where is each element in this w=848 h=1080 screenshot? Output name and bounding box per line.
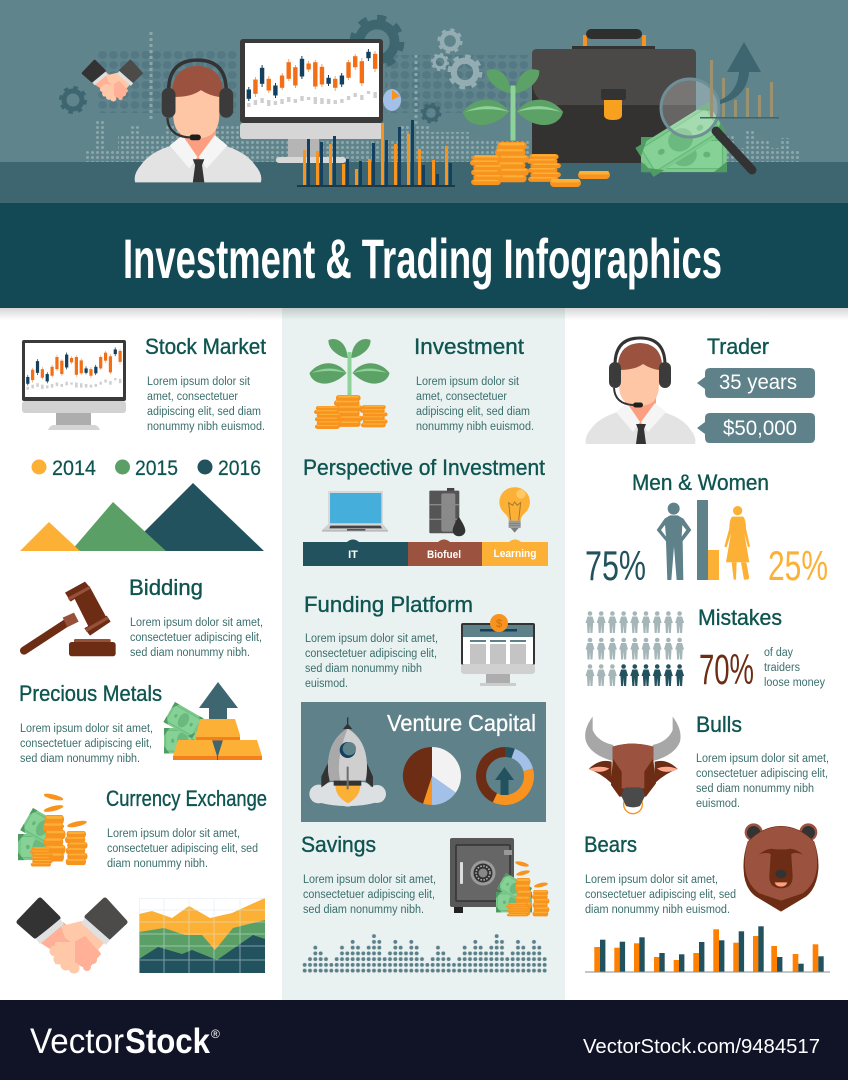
footer watermark bar: VectorStock.com/9484517 — [583, 1036, 820, 1058]
stat caption: traiders — [764, 662, 800, 674]
legend: years: 2015 — [135, 457, 178, 480]
body text: sed diam nonummy nibh — [305, 663, 422, 675]
bar comparison — [697, 500, 719, 580]
panel: mistakes — [586, 605, 825, 694]
legend: years: 2016 — [218, 457, 261, 480]
heading: Mistakes — [698, 605, 782, 630]
body text — [147, 376, 265, 433]
pictogram: 27 people — [586, 611, 684, 686]
body text — [303, 874, 436, 916]
heading: Funding Platform — [304, 592, 473, 617]
callout: income: $50,000 — [723, 417, 797, 440]
body text: consectetuer adipiscing elit, sed — [107, 843, 258, 855]
gears — [61, 19, 480, 122]
icon: funding monitor with coin — [461, 614, 535, 686]
stat: 75 percent: 75% — [585, 542, 646, 589]
icon: gavel — [24, 582, 116, 656]
body text: consectetuer adipiscing elit, — [20, 738, 152, 750]
body text: sed diam nonummy nibh. — [303, 904, 424, 916]
body text: consectetuer adipiscing elit, — [303, 889, 435, 901]
body text: euismod. — [696, 798, 740, 810]
heading: Stock Market — [145, 334, 266, 359]
body text: Lorem ipsum dolor sit amet, — [585, 874, 718, 886]
icon: sprout on coins — [310, 339, 390, 429]
panel: stock market — [22, 334, 266, 433]
body text: amet, consectetuer — [416, 391, 507, 403]
icon: bull head — [585, 717, 681, 814]
panel: currency exchange — [18, 786, 267, 870]
body text: Lorem ipsum dolor sit amet, — [20, 723, 153, 735]
body text: consectetuer adipiscing elit, — [305, 648, 437, 660]
mountain chart — [20, 483, 264, 551]
panel: savings — [301, 832, 549, 916]
segmented bar: it, biofuel, learning: IT — [348, 549, 358, 561]
body text — [696, 753, 829, 810]
icon: bear head — [743, 823, 818, 912]
panel: men and women — [585, 470, 828, 589]
icon: handshake — [19, 900, 125, 974]
footer watermark bar — [0, 1000, 848, 1080]
body text — [130, 617, 263, 659]
icon: safe with coins — [450, 838, 549, 916]
footer watermark bar: ® — [211, 1027, 220, 1041]
dot column chart — [302, 933, 547, 974]
heading: Bidding — [129, 575, 203, 600]
body text — [107, 828, 258, 870]
bar chart on desk — [297, 120, 455, 187]
hero illustration banner — [0, 0, 848, 203]
heading: Perspective of Investment — [303, 455, 545, 480]
heading: Savings — [301, 832, 376, 857]
icon: funding monitor with coin: $ — [496, 618, 502, 630]
body text: Lorem ipsum dolor sit amet, — [305, 633, 438, 645]
panel: perspective of investment — [303, 455, 548, 566]
body text: adipiscing elit, sed diam — [147, 406, 261, 418]
callout: age — [697, 368, 815, 398]
world map dot pattern — [86, 32, 800, 162]
body text: sed diam nonummy nibh. — [130, 647, 250, 659]
panel: precious metals — [19, 681, 262, 765]
plant growing from coins — [463, 69, 610, 187]
footer watermark bar: Vector — [30, 1022, 124, 1061]
icon: laptop — [322, 491, 388, 532]
body text: consectetuer adipiscing elit, — [696, 768, 828, 780]
callout: income — [697, 413, 815, 443]
donut chart with arrow — [481, 752, 529, 800]
heading: Bulls — [696, 712, 742, 737]
callout: age: 35 years — [719, 371, 797, 394]
body text: diam nonummy nibh. — [107, 858, 208, 870]
heading: Currency Exchange — [106, 786, 267, 811]
segmented bar: it, biofuel, learning — [303, 540, 548, 566]
body text: Lorem ipsum dolor sit amet, — [696, 753, 829, 765]
body text: amet, consectetuer — [147, 391, 238, 403]
icon: gold bars with arrow and money — [163, 682, 262, 760]
body text: nonummy nibh euismod. — [416, 421, 534, 433]
body text: consectetuer adipiscing elit, — [130, 632, 262, 644]
body text: nonummy nibh euismod. — [147, 421, 265, 433]
body text — [305, 633, 438, 690]
heading: Bears — [584, 832, 637, 857]
stat: 70 percent: 70% — [699, 646, 754, 694]
heading: Trader — [707, 334, 769, 359]
briefcase — [532, 29, 696, 163]
body text: Lorem ipsum dolor sit — [147, 376, 251, 388]
heading: Men & Women — [632, 470, 769, 495]
legend: years: 2014 — [52, 457, 96, 480]
panel: bears — [584, 823, 818, 916]
body text — [585, 874, 736, 916]
body text: adipiscing elit, sed diam — [416, 406, 530, 418]
body text: diam nonummy nibh euismod. — [585, 904, 730, 916]
panel: venture capital — [301, 702, 546, 822]
segmented bar: it, biofuel, learning: Learning — [494, 548, 536, 560]
money and magnifier — [636, 79, 752, 177]
pie chart — [403, 747, 461, 805]
icon: coins and money — [18, 792, 88, 867]
panel: bulls — [585, 712, 829, 814]
area chart — [139, 898, 265, 973]
panel: investment — [310, 334, 534, 433]
icon: trader portrait — [586, 338, 695, 444]
heading: Venture Capital — [387, 710, 536, 736]
body text: Lorem ipsum dolor sit amet, — [107, 828, 240, 840]
stat caption — [764, 647, 825, 689]
trader figure — [135, 60, 261, 182]
legend: years — [32, 457, 261, 480]
panel: funding platform — [304, 592, 535, 690]
icon: light bulb — [499, 487, 530, 533]
icon: man silhouette — [657, 503, 691, 580]
heading: Precious Metals — [19, 681, 162, 706]
heading: Investment — [414, 334, 524, 359]
body text — [416, 376, 534, 433]
panel: trader — [586, 334, 815, 444]
footer watermark bar: Stock — [125, 1022, 210, 1061]
body text — [20, 723, 153, 765]
growth arrow and thin bars — [700, 42, 779, 118]
icon: rocket — [309, 717, 386, 807]
icon: oil barrel — [429, 488, 465, 536]
body text: euismod. — [305, 678, 348, 690]
body text: consectetuer adipiscing elit, sed — [585, 889, 736, 901]
segmented bar: it, biofuel, learning: Biofuel — [427, 549, 461, 561]
title band — [0, 203, 848, 308]
bar chart: bottom right — [585, 926, 830, 972]
stat caption: loose money — [764, 677, 825, 689]
body text: sed diam nonummy nibh. — [20, 753, 140, 765]
icon: woman silhouette — [724, 506, 750, 580]
icon: stock monitor — [22, 340, 126, 430]
panel: bidding — [24, 575, 263, 659]
desktop monitor with candlestick chart — [240, 39, 401, 163]
body text: sed diam nonummy nibh — [696, 783, 814, 795]
stat caption: of day — [764, 647, 793, 659]
body text: Lorem ipsum dolor sit amet, — [130, 617, 263, 629]
body text: Lorem ipsum dolor sit — [416, 376, 520, 388]
body text: Lorem ipsum dolor sit amet, — [303, 874, 436, 886]
handshake icon — [83, 61, 141, 102]
